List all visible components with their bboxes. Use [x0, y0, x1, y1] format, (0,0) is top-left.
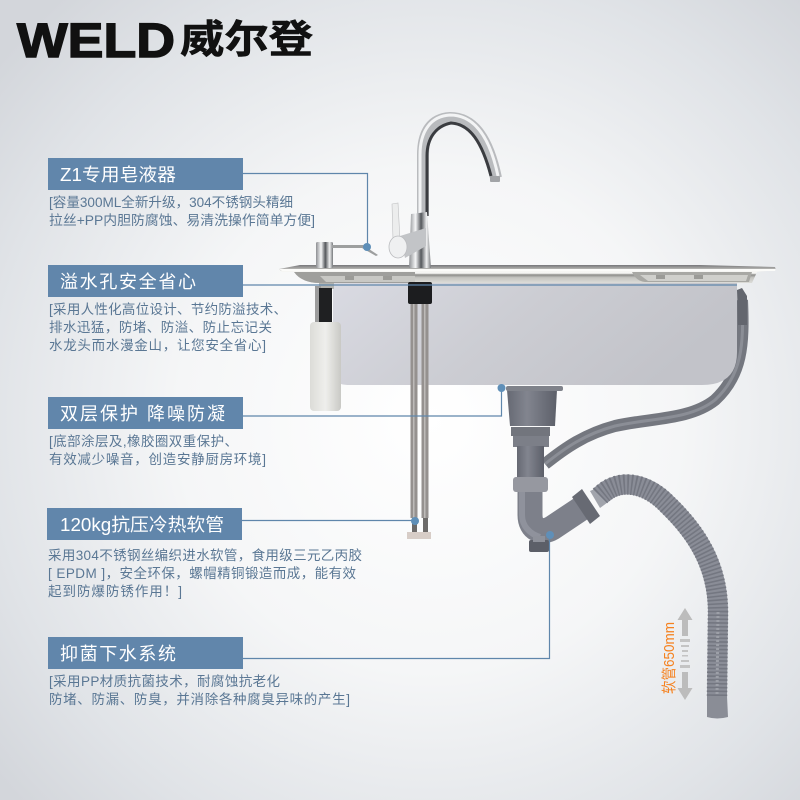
- length arrow and label: 软管650mm: [661, 622, 678, 694]
- panel: water hose: 起到防爆防锈作用！]: [48, 584, 182, 599]
- panel: overflow hole: [48, 265, 737, 353]
- drain pipe and trap: [506, 386, 615, 552]
- panel: double layer protection: 有效减少噪音，创造安静厨房环境]: [49, 451, 266, 467]
- panel: drainage system: [48, 531, 554, 707]
- panel: water hose: [47, 508, 419, 599]
- panel: double layer protection: [48, 384, 506, 467]
- panel: drainage system: 防堵、防漏、防臭，并消除各种腐臭异味的产生]: [49, 692, 350, 707]
- panel: overflow hole: 水龙头而水漫金山，让您安全省心]: [49, 337, 266, 353]
- panel: overflow hole: 排水迅猛，防堵、防溢、防止忘记关: [49, 320, 272, 335]
- panel: water hose: 120kg抗压冷热软管: [60, 515, 224, 535]
- panel: soap dispenser: [48, 158, 371, 251]
- panel: drainage system: [采用PP材质抗菌技术，耐腐蚀抗老化: [49, 674, 280, 689]
- panel: double layer protection: [底部涂层及,橡胶圈双重保护、: [49, 433, 238, 449]
- logo: WELD 威尔登: [17, 15, 313, 68]
- logo: WELD 威尔登: WELD: [17, 15, 175, 68]
- panel: soap dispenser: [容量300ML全新升级，304不锈钢头精细: [49, 194, 293, 210]
- faucet: [389, 115, 500, 268]
- corrugated drain hose: [600, 484, 728, 718]
- panel: water hose: 采用304不锈钢丝编织进水软管，食用级三元乙丙胶: [48, 547, 362, 563]
- length arrow and label: [661, 608, 692, 700]
- panel: overflow hole: [采用人性化高位设计、节约防溢技术、: [49, 301, 287, 317]
- panel: overflow hole: 溢水孔安全省心: [60, 272, 196, 292]
- overflow hose: [545, 288, 747, 464]
- cold and hot water hoses: [407, 282, 432, 539]
- panel: soap dispenser: Z1专用皂液器: [60, 165, 176, 185]
- panel: soap dispenser: 拉丝+PP内胆防腐蚀、易清洗操作简单方便]: [49, 212, 315, 228]
- panel: double layer protection: 双层保护 降噪防凝: [60, 404, 225, 424]
- panel: water hose: [ EPDM ]，安全环保，螺帽精铜锻造而成，能有效: [48, 565, 356, 581]
- soap dispenser: [310, 242, 378, 411]
- sink bowl: [333, 282, 737, 385]
- illustration: sink assembly: [279, 115, 776, 718]
- sink rim: [279, 265, 776, 283]
- logo: WELD 威尔登: 威尔登: [180, 19, 313, 62]
- panel: drainage system: 抑菌下水系统: [60, 644, 176, 664]
